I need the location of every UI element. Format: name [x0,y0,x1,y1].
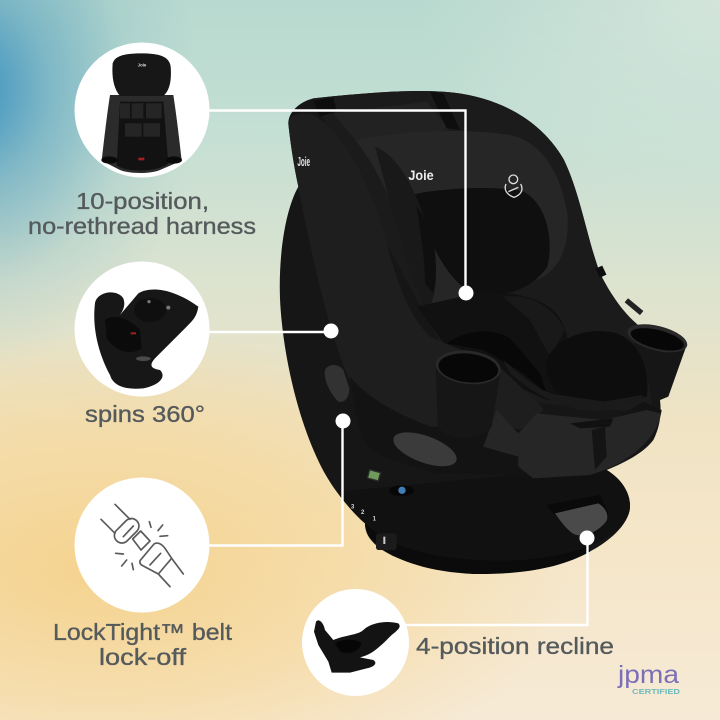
foot button [376,533,397,550]
position numbers: 3 [351,504,355,510]
mini seat side view [314,620,400,673]
back shell [313,91,653,413]
jpma certified logo: jpma [617,661,679,689]
label: harness: 10-position, [76,188,209,214]
seat silhouette [280,91,687,573]
label: belt lock-off [53,619,233,670]
front cushion fabric [518,410,661,478]
connector: spin [208,324,338,338]
position numbers [351,504,377,523]
mini seat reclined [94,289,198,389]
label: recline: 4-position recline [416,633,614,659]
label: harness [28,188,256,239]
base latch [546,495,608,535]
inner dark cushion [412,188,550,295]
cup holder left [434,347,503,438]
connector: belt lock-off [208,414,350,546]
cup holder right [625,319,690,399]
circle: recline photo [302,589,409,696]
child icon on head pad [505,175,522,197]
position numbers: 1 [373,517,377,523]
fabric under cup [483,410,518,457]
green indicator [367,470,381,481]
leg pillow [546,331,647,402]
side tags [596,266,643,315]
circle: spin photo [74,262,210,396]
connector: harness [208,110,474,300]
side gray pad [389,425,461,473]
logo on head pad: Joie [408,167,434,183]
circle: harness photo [74,42,210,178]
circle: belt icon [74,478,210,612]
head pad [355,131,568,313]
harness buckle area [447,331,547,393]
jpma certified logo [617,661,681,696]
jpma certified logo: CERTIFIED [632,687,681,696]
side wing panel [288,113,543,433]
label: spin: spins 360° [85,401,205,427]
recline handle [325,365,349,402]
connector: recline [405,530,594,625]
seat pad [417,293,603,400]
seat belt buckle icon [101,504,183,587]
logo on wing: Joie [297,155,310,169]
label: belt lock-off: LockTight™ belt [53,619,233,645]
label: harness: no-rethread harness [28,213,256,239]
swivel foot [365,523,590,574]
mini seat front view: Joie [138,63,147,68]
position numbers: 2 [361,510,365,516]
headrest top [333,102,450,142]
swivel base [338,468,630,561]
label: belt lock-off: lock-off [99,644,187,670]
blue dial [389,485,414,496]
crotch cushion strip [503,360,643,411]
inner side bolster [375,147,436,312]
main product: car seat [280,91,690,574]
headrest strap left [313,97,337,117]
lower body [350,377,662,476]
headrest strap right [430,92,460,130]
